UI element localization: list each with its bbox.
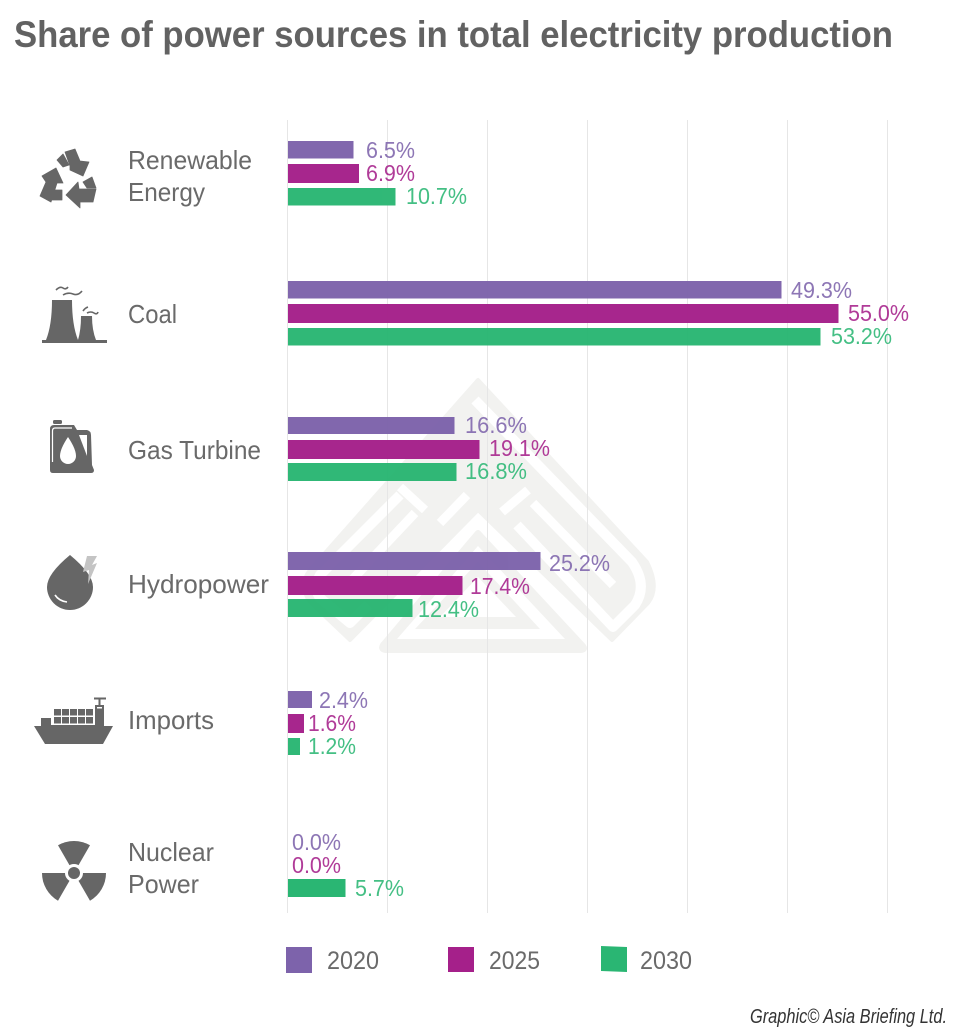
panel: coal xyxy=(42,277,909,349)
label: Hydropower xyxy=(128,569,269,599)
values xyxy=(308,687,368,759)
icon: radiation symbol xyxy=(42,841,106,901)
bars xyxy=(288,281,838,346)
icon: water drop with lightning xyxy=(47,555,97,610)
legend xyxy=(286,946,692,975)
label: Energy xyxy=(128,177,205,207)
values: 0.0% xyxy=(292,852,341,878)
values: 0.0% xyxy=(292,829,341,855)
legend item 2020: 2020 xyxy=(327,947,379,975)
values: 19.1% xyxy=(489,435,550,461)
icon: container ship xyxy=(34,698,113,744)
values: 6.9% xyxy=(366,160,415,186)
values: 16.8% xyxy=(465,458,527,484)
panel: renewable energy xyxy=(40,137,467,209)
values xyxy=(418,550,610,622)
values: 53.2% xyxy=(831,323,892,349)
values: 25.2% xyxy=(549,550,610,576)
values: 55.0% xyxy=(848,300,909,326)
bars xyxy=(288,691,312,755)
label: Coal xyxy=(128,299,177,329)
watermark logo xyxy=(304,380,654,650)
bars xyxy=(288,417,480,481)
bar xyxy=(288,879,346,897)
icon: fuel canister xyxy=(50,420,94,473)
legend item 2020 xyxy=(286,947,379,975)
legend item 2025: 2025 xyxy=(489,947,540,975)
values: 2.4% xyxy=(319,687,368,713)
values: 49.3% xyxy=(791,277,852,303)
icon: recycling arrows xyxy=(40,149,96,208)
values: 16.6% xyxy=(465,412,527,438)
icon: power plant cooling towers xyxy=(42,287,107,343)
values xyxy=(791,277,909,349)
label: Nuclear xyxy=(128,837,214,867)
bars xyxy=(288,552,540,617)
bars xyxy=(288,141,396,206)
legend item 2030: 2030 xyxy=(640,947,692,975)
values: 1.2% xyxy=(308,733,356,759)
label: Imports xyxy=(128,705,214,735)
panel: imports xyxy=(34,687,368,759)
values: 17.4% xyxy=(470,573,530,599)
panel: nuclear power xyxy=(42,829,404,901)
grid lines xyxy=(288,120,888,913)
label: Gas Turbine xyxy=(128,435,261,465)
panel: hydropower xyxy=(47,550,610,622)
values: 12.4% xyxy=(418,596,479,622)
label xyxy=(128,145,252,207)
values: 1.6% xyxy=(308,710,356,736)
values: 6.5% xyxy=(366,137,415,163)
values: 5.7% xyxy=(355,875,404,901)
values xyxy=(292,829,404,901)
values xyxy=(465,412,550,484)
label: Power xyxy=(128,869,199,899)
label xyxy=(128,837,214,899)
panel: gas turbine xyxy=(50,412,550,484)
values xyxy=(366,137,467,209)
legend item 2025 xyxy=(448,947,540,975)
values: 10.7% xyxy=(406,183,467,209)
legend item 2030 xyxy=(601,946,692,975)
title: Share of power sources in total electricity production xyxy=(14,14,893,55)
label: Renewable xyxy=(128,145,252,175)
